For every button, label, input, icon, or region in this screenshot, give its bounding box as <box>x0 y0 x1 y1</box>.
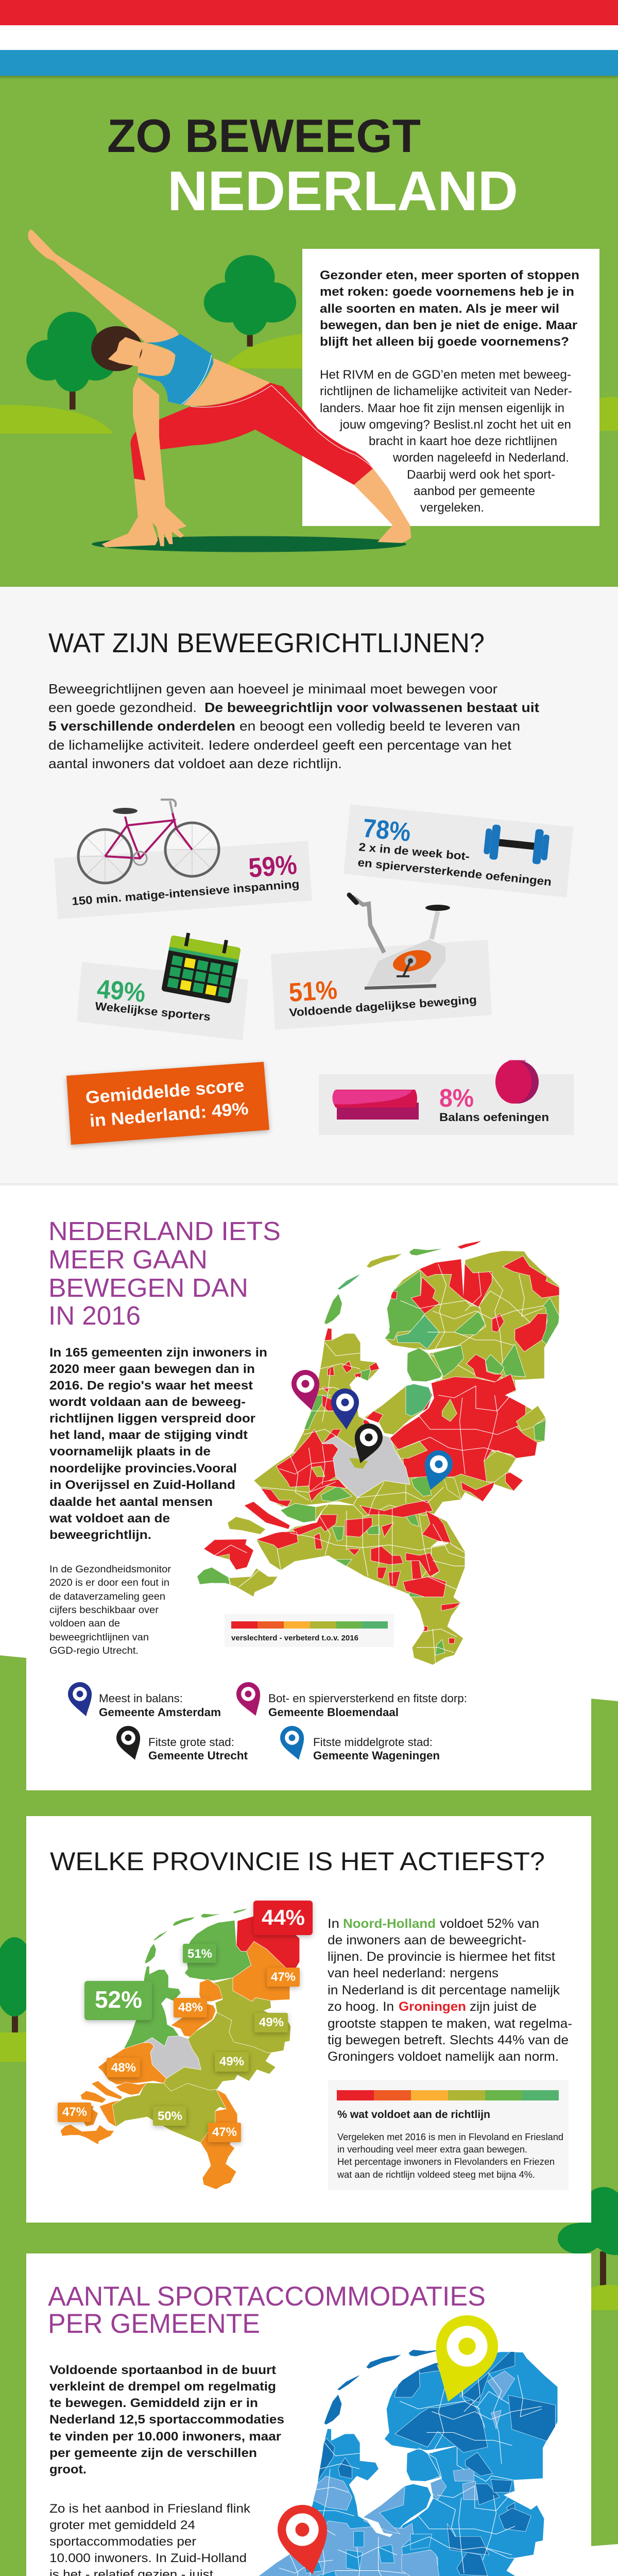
title: NEDERLAND <box>167 160 518 223</box>
card: 49% wekelijkse sporters <box>77 930 248 1040</box>
text block: intro body: vergeleken. <box>420 501 484 515</box>
panel: hero <box>0 76 618 587</box>
icon: right hill <box>599 397 618 431</box>
heading: WAT ZIJN BEWEEGRICHTLIJNEN? <box>48 628 485 658</box>
legend: province score <box>328 2080 569 2190</box>
label: en spierversterkende oefeningen <box>357 856 552 888</box>
title <box>107 110 518 223</box>
text block: province explanation: van heel nederland: nergens <box>328 1966 499 1980</box>
callout: gemiddelde score: Gemiddelde score <box>85 1076 245 1108</box>
text block: bold paragraph: Nederland 12,5 sportaccommodaties <box>49 2413 284 2427</box>
text block: paragraph: Zo is het aanbod in Friesland flink <box>49 2502 251 2516</box>
text block: bold paragraph: in Overijssel en Zuid-Holland <box>49 1478 235 1492</box>
text block: intro body: worden nageleefd in Nederland. <box>392 451 569 465</box>
labels: province percentages: 48% <box>178 2001 203 2014</box>
text block: province explanation: lijnen. De provincie is hiermee het fitst <box>328 1950 555 1964</box>
heading <box>48 1216 281 1330</box>
label <box>357 840 552 888</box>
card: 59% inspanning <box>54 800 312 919</box>
text block: province explanation: tig bewegen betreft. Slechts 44% van de <box>328 2033 569 2047</box>
text block: paragraph: groter met gemiddeld 24 <box>49 2518 195 2532</box>
text block: province explanation: zo hoog. In <box>328 1999 394 2014</box>
text block: intro body: landers. Maar hoe fit zijn mensen eigenlijk in <box>320 401 564 415</box>
map: sport accommodations <box>259 2350 557 2576</box>
text block: bold paragraph <box>49 2363 284 2477</box>
labels: province percentages: 47% <box>62 2105 87 2119</box>
label: 150 min. matige-intensieve inspanning <box>71 877 300 908</box>
text block: province explanation: in Nederland is dit percentage namelijk <box>328 1983 560 1997</box>
text block: intro bold: bewegen, dan ben je niet de enige. Maar <box>320 318 577 332</box>
text block: bold paragraph: verkleint de drempel om regelmatig <box>49 2380 276 2394</box>
text block: explanation <box>48 681 539 771</box>
text block: province explanation: Groningen <box>399 1999 466 2014</box>
heading: WELKE PROVINCIE IS HET ACTIEFST? <box>50 1847 545 1876</box>
labels: province percentages: 47% <box>271 1970 296 1984</box>
text block: explanation: De beweegrichtlijn voor volwassenen bestaat uit <box>204 700 539 715</box>
legend: province score: Het percentage inwoners in Flevolanders en Friezen <box>337 2157 555 2167</box>
legend: pins: Bot- en spierversterkend en fitste dorp: <box>268 1692 467 1705</box>
labels: province percentages <box>58 1901 313 2142</box>
text block: province explanation: zijn juist de <box>470 1999 537 2014</box>
icon: yoga mat <box>332 1090 419 1120</box>
percentage 51: 51% <box>288 975 338 1007</box>
text block: province explanation: voldoet 52% van <box>440 1917 539 1931</box>
label: Wekelijkse sporters <box>95 999 211 1023</box>
labels: province percentages: 48% <box>111 2061 136 2075</box>
text block: explanation: aantal inwoners dat voldoet aan deze richtlijn. <box>48 756 342 771</box>
heading: NEDERLAND IETS <box>48 1216 281 1246</box>
legend: pins <box>65 1679 467 1764</box>
legend: province score: in verhouding veel meer extra gaan bewegen. <box>337 2144 527 2155</box>
card: 8% balans oefeningen <box>319 1060 574 1135</box>
green side columns <box>0 1655 618 2576</box>
label: Balans oefeningen <box>439 1111 549 1124</box>
panel: intro text box <box>302 249 599 526</box>
text block: explanation: 5 verschillende onderdelen <box>48 718 235 734</box>
label: 2 x in de week bot- <box>358 840 470 863</box>
text block: explanation: een goede gezondheid. <box>48 700 197 715</box>
text block: note: beweegrichtlijnen van <box>49 1632 149 1643</box>
text block: bold paragraph: 2020 meer gaan bewegen dan in <box>49 1362 255 1376</box>
text block: province explanation: In <box>328 1917 339 1931</box>
text block: bold paragraph <box>49 1346 267 1542</box>
percentage 8: 8% <box>439 1084 474 1112</box>
card: 51% dagelijkse beweging <box>271 895 492 1030</box>
text block: intro bold: alle soorten en maten. Als je meer wil <box>320 302 559 316</box>
labels: province percentages: 50% <box>158 2109 182 2123</box>
icon: red pin <box>272 2500 337 2576</box>
labels: province percentages: 49% <box>219 2055 244 2069</box>
text block: intro bold <box>320 268 579 349</box>
heading: BEWEGEN DAN <box>48 1273 248 1302</box>
text block: note: de dataverzameling geen <box>49 1591 165 1602</box>
legend: province score: % wat voldoet aan de richtlijn <box>337 2109 490 2121</box>
text block: explanation: Beweegrichtlijnen geven aan hoeveel je minimaal moet bewegen voor <box>48 681 497 697</box>
labels: province percentages: 44% <box>262 1905 305 1929</box>
text block: note <box>49 1564 171 1656</box>
text block: intro body: richtlijnen de lichamelijke activiteit van Neder- <box>320 384 572 398</box>
text block: bold paragraph: richtlijnen liggen verspreid door <box>49 1412 255 1426</box>
legend: pins: Gemeente Utrecht <box>148 1749 248 1762</box>
text block: note: In de Gezondheidsmonitor <box>49 1564 171 1575</box>
percentage 59: 59% <box>247 850 298 884</box>
icon: calendar <box>161 930 242 1004</box>
top flag stripes <box>0 0 618 76</box>
legend: province score: Vergeleken met 2016 is men in Flevoland en Friesland <box>337 2132 563 2142</box>
text block: bold paragraph: wordt voldaan aan de beweeg- <box>49 1395 246 1409</box>
legend: pins: Gemeente Amsterdam <box>99 1706 221 1719</box>
legend: colour scale <box>225 1614 394 1647</box>
legend: pins: Fitste grote stad: <box>148 1736 234 1749</box>
percentage 49: 49% <box>96 974 147 1008</box>
text block: intro body: bracht in kaart hoe deze richtlijnen <box>369 434 557 448</box>
heading: IN 2016 <box>48 1301 141 1330</box>
panel: welke provincie is het actiefst <box>26 1816 591 2223</box>
text block: province explanation <box>328 1917 572 2064</box>
heading: AANTAL SPORTACCOMMODATIES <box>48 2281 486 2312</box>
text block: intro body: aanbod per gemeente <box>414 484 535 498</box>
percentage 78: 78% <box>362 813 412 847</box>
labels: province percentages: 51% <box>187 1947 212 1961</box>
text block: note: GGD-regio Utrecht. <box>49 1646 139 1656</box>
panel: aantal sportaccommodaties <box>26 2253 591 2576</box>
labels: province percentages: 49% <box>259 2015 284 2029</box>
text block: bold paragraph: te vinden per 10.000 inwoners, maar <box>49 2430 281 2444</box>
text block: intro bold: Gezonder eten, meer sporten of stoppen <box>320 268 579 282</box>
legend: pins: Gemeente Bloemendaal <box>268 1706 399 1719</box>
text block: intro body: Daarbij werd ook het sport- <box>407 468 555 482</box>
panel: nederland iets meer gaan bewegen <box>49 1222 559 1762</box>
icon: exercise bike <box>349 895 450 990</box>
text block: bold paragraph: voornamelijk plaats in de <box>49 1445 211 1459</box>
legend: colour scale: verslechterd - verbeterd t.o.v. 2016 <box>231 1634 358 1642</box>
map: change per municipality <box>197 1241 559 1665</box>
text block: bold paragraph: In 165 gemeenten zijn inwoners in <box>49 1346 267 1360</box>
icon: pins on map <box>288 1367 456 1494</box>
legend: province score: wat aan de richtlijn voldeed steeg met bijna 4%. <box>337 2170 535 2180</box>
text block: bold paragraph: noordelijke provincies.Vooral <box>49 1462 237 1476</box>
text block: bold paragraph: per gemeente zijn de verschillen <box>49 2446 257 2460</box>
title: ZO BEWEEGT <box>107 110 421 162</box>
legend: pins: Meest in balans: <box>99 1692 183 1705</box>
text block: note: voldoen aan de <box>49 1618 120 1629</box>
text block: province explanation: de inwoners aan de beweegricht- <box>328 1933 526 1947</box>
panel: wat zijn beweegrichtlijnen <box>0 587 618 1187</box>
legend: pins: Gemeente Wageningen <box>313 1749 440 1762</box>
heading: PER GEMEENTE <box>48 2309 260 2339</box>
legend: pins: Fitste middelgrote stad: <box>313 1736 433 1749</box>
text block: paragraph <box>49 2502 251 2576</box>
text block: bold paragraph: daalde het aantal mensen <box>49 1495 213 1509</box>
text block: intro body: jouw omgeving? Beslist.nl zocht het uit en <box>339 418 571 432</box>
text block: paragraph: 10.000 inwoners. In Zuid-Holland <box>49 2551 247 2565</box>
text block: intro body <box>320 368 572 515</box>
icon: trees and hills <box>0 255 302 434</box>
callout: gemiddelde score: in Nederland: 49% <box>89 1099 249 1131</box>
text block: province explanation: Groningers voldoet namelijk aan norm. <box>328 2049 559 2064</box>
text block: bold paragraph: beweegrichtlijn. <box>49 1528 151 1542</box>
text block: note: cijfers beschikbaar over <box>49 1605 159 1616</box>
labels: province percentages: 52% <box>95 1986 142 2013</box>
text block: bold paragraph: te bewegen. Gemiddeld zijn er in <box>49 2396 258 2410</box>
icon: yellow pin <box>419 2307 506 2412</box>
text block: bold paragraph: Voldoende sportaanbod in de buurt <box>49 2363 276 2377</box>
text block: province explanation: Noord-Holland <box>343 1917 436 1931</box>
icon: gym ball <box>495 1060 539 1104</box>
text block: province explanation: grootste stappen te maken, wat regelma- <box>328 2016 572 2031</box>
text block: bold paragraph: het land, maar de stijging vindt <box>49 1428 248 1442</box>
text block: note: 2020 is er door een fout in <box>49 1578 169 1588</box>
icon: dumbbell <box>483 824 550 865</box>
text block: bold paragraph: 2016. De regio's waar het meest <box>49 1379 253 1393</box>
heading <box>48 2281 486 2339</box>
text block: intro body: Het RIVM en de GGD’en meten met beweeg- <box>320 368 571 382</box>
heading: MEER GAAN <box>48 1245 208 1274</box>
callout: gemiddelde score <box>66 1062 269 1145</box>
text block: explanation: de lichamelijke activiteit. Iedere onderdeel geeft een percentage van het <box>48 737 512 753</box>
text block: explanation: en beoogt een volledig beeld te leveren van <box>239 718 520 734</box>
card: 78% bot en spier <box>344 804 573 897</box>
text block: bold paragraph: groot. <box>49 2463 87 2477</box>
text block: intro bold: blijft het alleen bij goede voornemens? <box>320 335 569 349</box>
labels: province percentages: 47% <box>212 2125 237 2139</box>
text block: paragraph: sportaccommodaties per <box>49 2535 196 2549</box>
icon: bicycle <box>78 800 219 883</box>
text block: bold paragraph: wat voldoet aan de <box>49 1512 170 1526</box>
map: provinces <box>61 1908 300 2190</box>
icon: yoga woman <box>28 230 411 552</box>
text block: intro bold: met roken: goede voornemens heb je in <box>320 285 574 299</box>
label: Voldoende dagelijkse beweging <box>289 993 477 1019</box>
